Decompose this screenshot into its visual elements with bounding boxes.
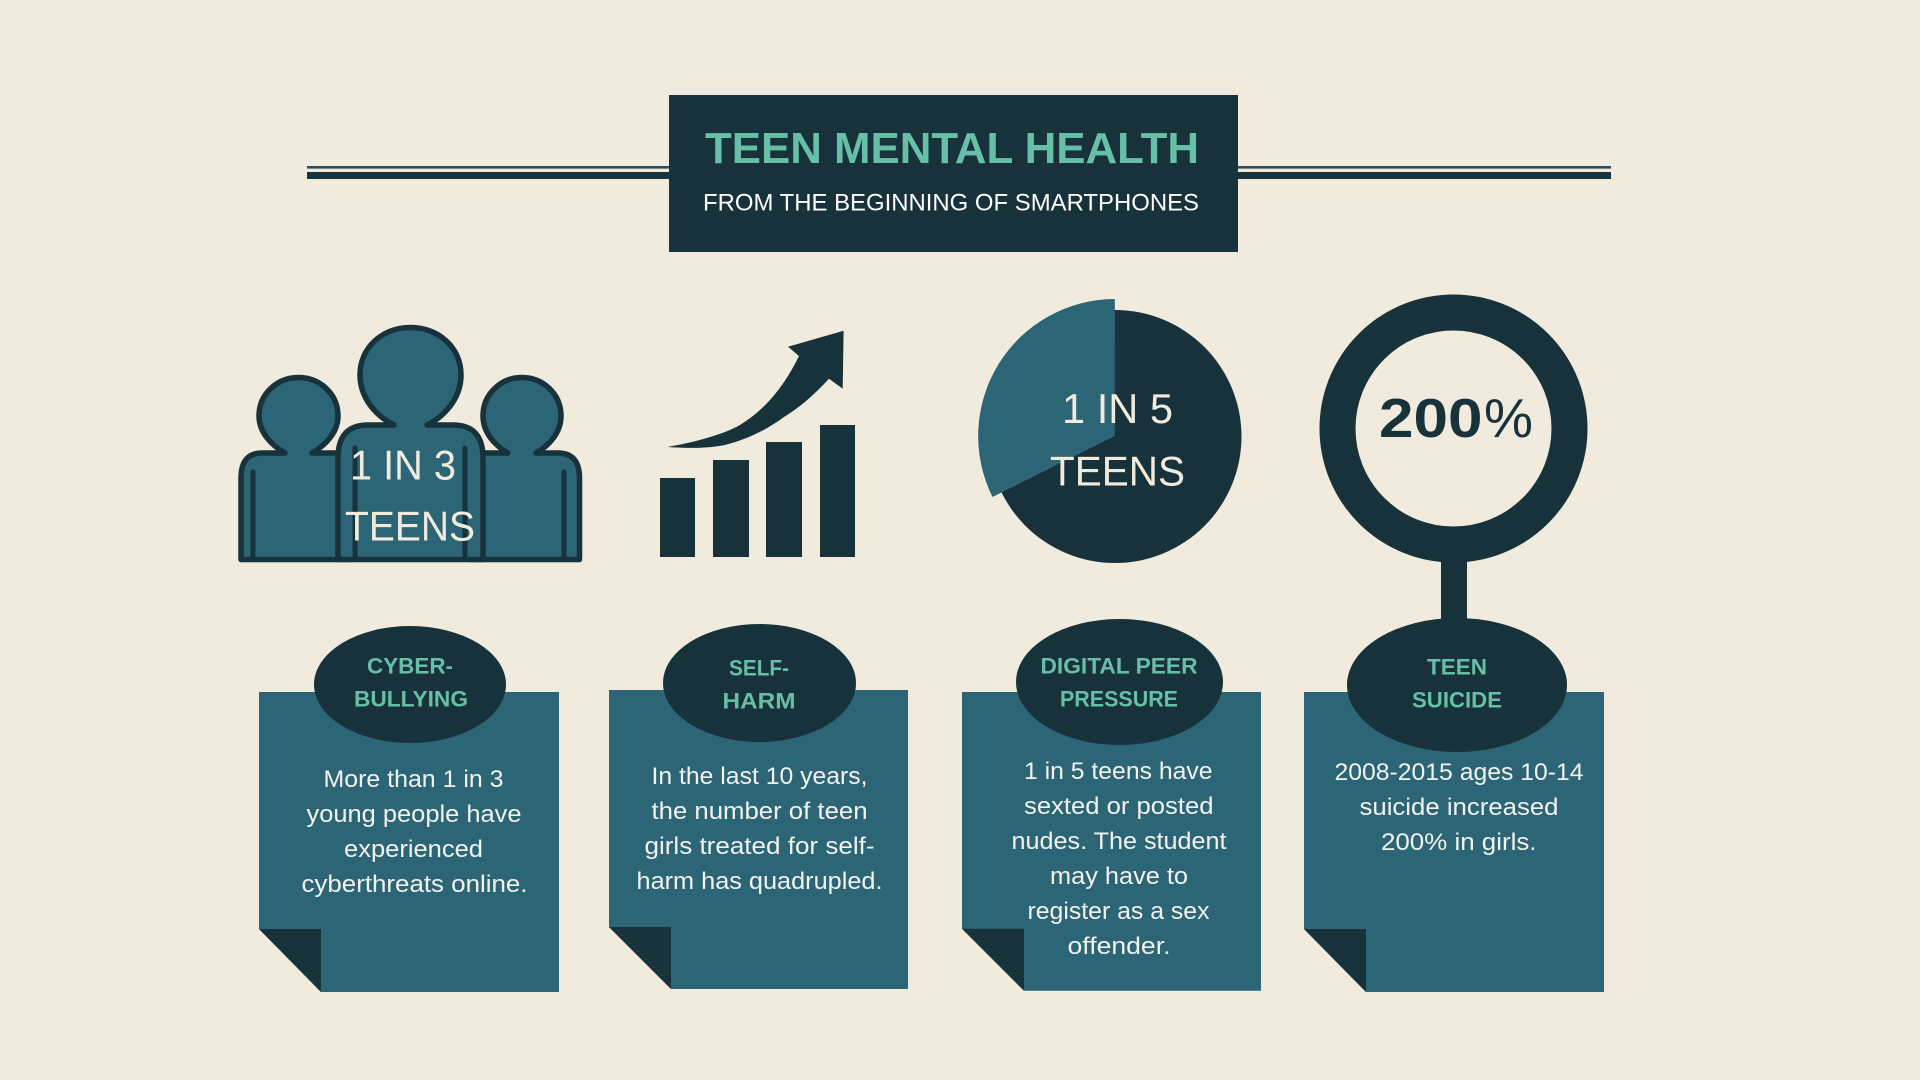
stat: 1 in 3 teens — [345, 442, 475, 550]
body text — [1334, 759, 1584, 856]
stat: 200% — [1379, 387, 1533, 449]
body text: 200% in girls. — [1381, 829, 1536, 856]
panel: teen suicide — [1304, 618, 1604, 992]
stat: 200%: % — [1484, 387, 1533, 449]
body text: suicide increased — [1360, 794, 1558, 821]
body text: 2008-2015 ages 10-14 — [1334, 759, 1584, 786]
chart: pie 1 in 5 teens — [978, 299, 1242, 563]
subtitle: FROM THE BEGINNING OF SMARTPHONES — [703, 190, 1199, 216]
panel: cyberbullying — [259, 626, 559, 992]
body text: the number of teen — [652, 798, 868, 825]
body text — [1012, 758, 1227, 960]
body text — [302, 766, 528, 898]
icon: rising bar chart with arrow — [660, 331, 855, 557]
icon: ring with stem, 200 percent — [1338, 312, 1570, 625]
oval heading: digital peer pressure — [1016, 619, 1223, 745]
stat: 1 in 5 teens: 1 IN 5 — [1062, 385, 1173, 432]
body text: offender. — [1068, 933, 1170, 960]
oval heading: teen suicide: SUICIDE — [1412, 688, 1502, 712]
stat: 1 in 5 teens: TEENS — [1050, 448, 1185, 494]
oval heading: cyber-bullying: CYBER- — [367, 654, 453, 678]
oval heading: digital peer pressure: PRESSURE — [1060, 686, 1178, 712]
body text: young people have — [306, 801, 522, 828]
panel: self-harm — [609, 624, 908, 989]
oval heading: teen suicide: TEEN — [1427, 654, 1487, 680]
body text — [636, 763, 882, 895]
oval heading: digital peer pressure: DIGITAL PEER — [1040, 654, 1198, 678]
stat: 1 in 5 teens — [1050, 385, 1185, 494]
oval heading: self-harm: HARM — [722, 688, 796, 714]
body text: sexted or posted — [1024, 793, 1214, 820]
panel: digital peer pressure — [962, 619, 1261, 991]
body text: harm has quadrupled. — [636, 868, 882, 895]
icon: three people with 1 in 3 teens — [241, 328, 580, 560]
body text: nudes. The student — [1012, 828, 1227, 855]
title banner — [669, 95, 1238, 252]
title: TEEN MENTAL HEALTH — [705, 124, 1199, 173]
stat: 1 in 3 teens: TEENS — [345, 502, 475, 550]
body text: may have to — [1050, 863, 1188, 890]
stat: 200%: 200 — [1379, 387, 1482, 449]
oval heading: cyber-bullying — [314, 626, 506, 743]
body text: girls treated for self- — [644, 833, 874, 860]
oval heading: self-harm: SELF- — [729, 656, 789, 680]
oval heading: teen suicide — [1347, 618, 1567, 752]
body text: 1 in 5 teens have — [1024, 758, 1212, 785]
stat: 1 in 3 teens: 1 IN 3 — [350, 442, 456, 488]
body text: register as a sex — [1028, 898, 1210, 925]
oval heading: self-harm — [663, 624, 856, 742]
body text: experienced — [344, 836, 483, 863]
body text: cyberthreats online. — [302, 871, 528, 898]
body text: In the last 10 years, — [652, 763, 868, 790]
body text: More than 1 in 3 — [324, 766, 504, 793]
oval heading: cyber-bullying: BULLYING — [354, 686, 468, 712]
